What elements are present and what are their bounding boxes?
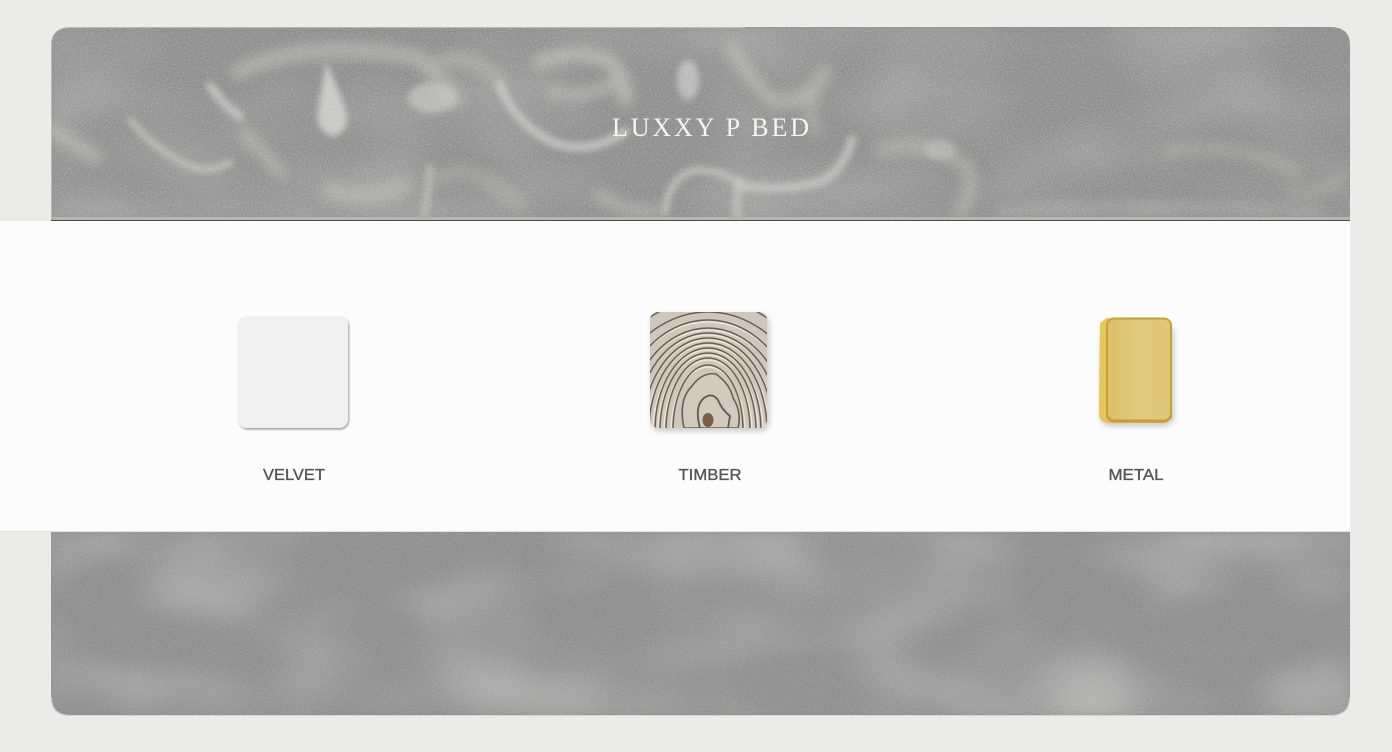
label: velvet: VELVET <box>263 467 325 484</box>
panel: white material band <box>0 221 1350 532</box>
title: LUXXY P BED <box>612 113 809 142</box>
label: timber: TIMBER <box>678 467 742 484</box>
panel: top leather with marble veining <box>51 27 1350 221</box>
swatch: metal <box>1099 318 1172 484</box>
swatch: velvet <box>238 316 348 484</box>
label: metal: METAL <box>1108 467 1164 484</box>
panel: bottom leather <box>51 532 1350 716</box>
blob highlights <box>318 60 956 160</box>
swatch: timber <box>650 312 772 480</box>
